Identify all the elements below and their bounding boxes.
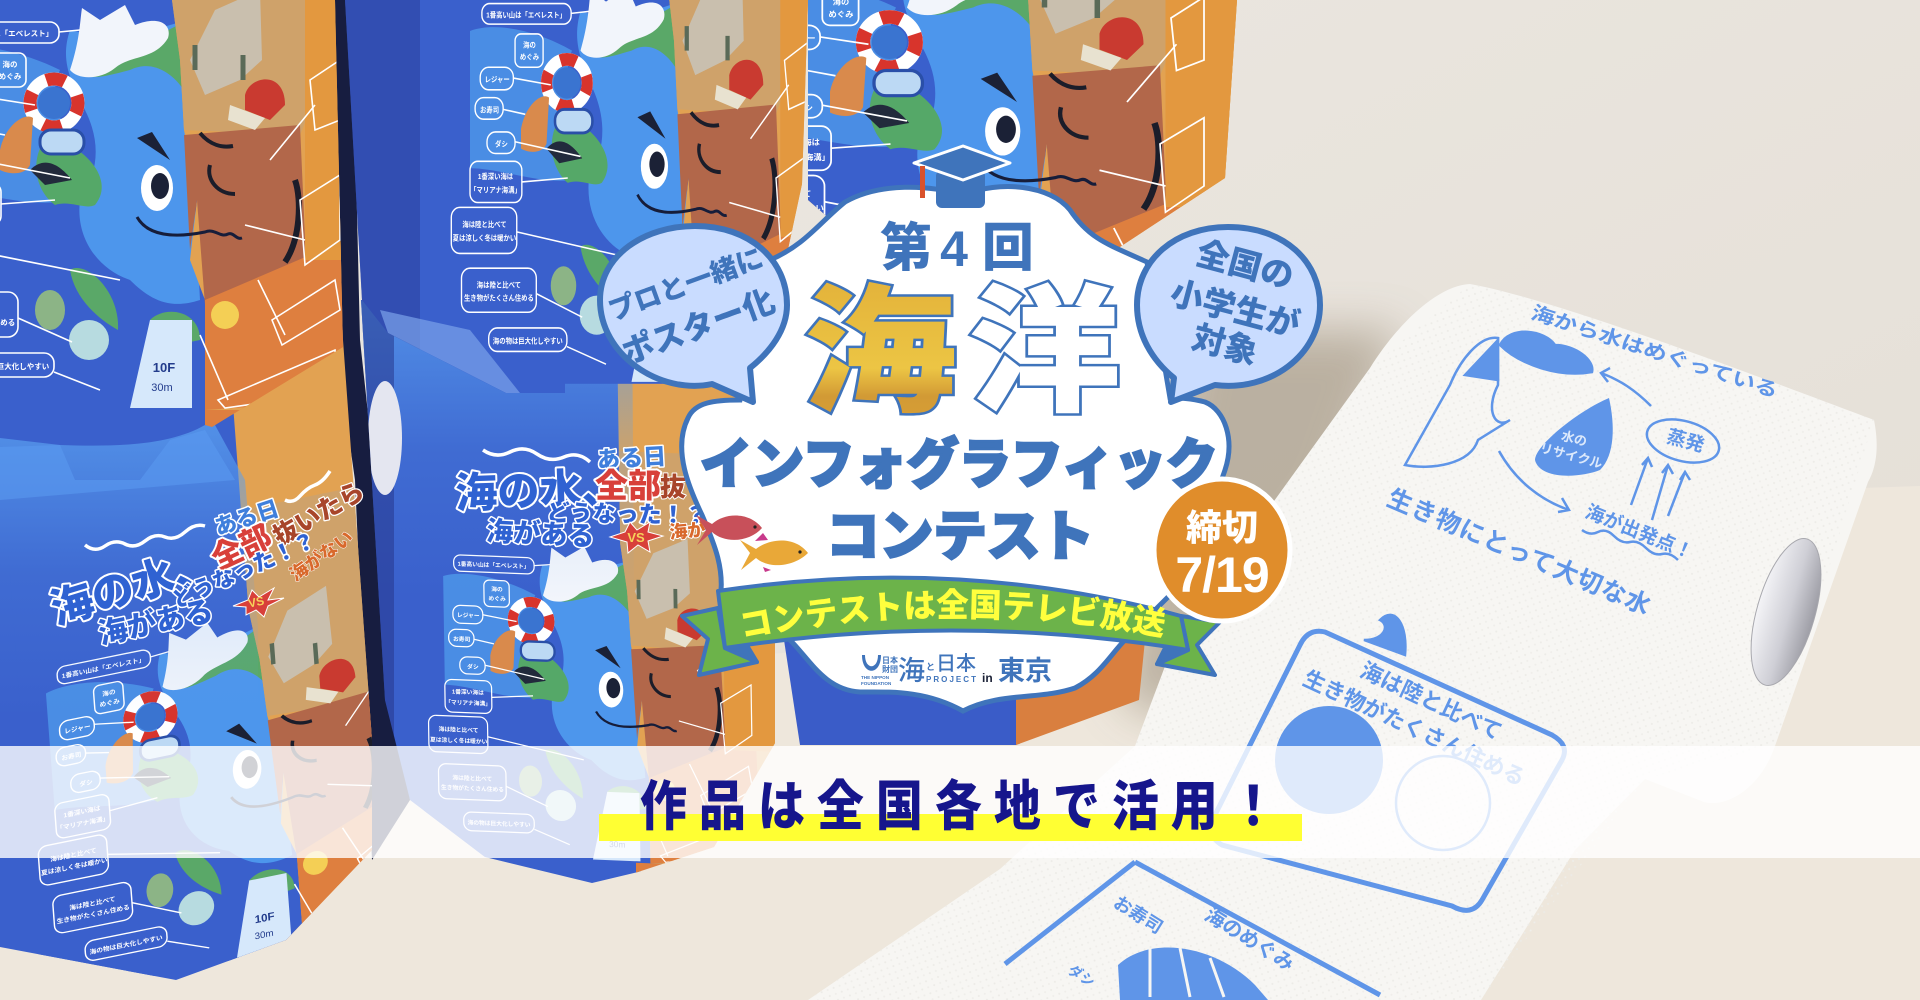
- roll printed captions: リサイクル: [1538, 440, 1604, 471]
- package title: bottom right: 抜: [660, 472, 686, 502]
- logo: The Nippon Foundation, Sea and Japan Project in Tokyo: [861, 652, 1052, 686]
- translucent white band: [0, 746, 1920, 858]
- speech bubble: with professionals: プロと一緒に: [605, 243, 767, 326]
- logo: The Nippon Foundation, Sea and Japan Project in Tokyo: と: [926, 662, 935, 672]
- package title: bottom right: 海の水、: [455, 464, 624, 517]
- package: bottom left: [0, 340, 372, 980]
- package title: bottom left: 海の水、: [46, 539, 220, 633]
- speech bubble: elementary students: 小学生が: [1166, 274, 1304, 344]
- contest badge: [597, 144, 1323, 714]
- roll printed captions: 生き物にとって大切な水: [1383, 484, 1655, 621]
- heading: ocean: [804, 276, 1121, 430]
- roll printed captions: ダシ: [1065, 961, 1098, 990]
- speech bubble: with professionals: ポスター化: [617, 282, 780, 371]
- roll printed captions: 水の: [1560, 428, 1589, 449]
- band highlight: yellow bar: [599, 814, 1302, 841]
- band caption: 作品は全国各地で活用！: [640, 776, 1289, 837]
- package title: bottom right: VS: [627, 530, 645, 545]
- logo: The Nippon Foundation, Sea and Japan Project in Tokyo: FOUNDATION: [861, 681, 892, 686]
- package title: bottom left: 抜いたら: [269, 477, 369, 551]
- logo: The Nippon Foundation, Sea and Japan Project in Tokyo: 海: [898, 656, 925, 686]
- roll printed captions: 海が出発点！: [1582, 500, 1697, 564]
- water drop: [1535, 398, 1613, 476]
- package title: bottom right: 全部: [595, 467, 661, 504]
- package: top centre: [345, 0, 808, 393]
- package title: bottom left: どうなった！？: [169, 527, 319, 613]
- shrimp: [1118, 948, 1268, 1000]
- roll printed captions: 蒸発: [1664, 426, 1707, 457]
- package title: bottom right: [455, 443, 708, 553]
- package title: bottom left: 海がある: [96, 594, 216, 651]
- wave under start text: [1582, 530, 1678, 560]
- logo: The Nippon Foundation, Sea and Japan Project in Tokyo: 日本: [936, 652, 976, 675]
- package title: bottom left: 全部: [206, 519, 277, 576]
- heading: 4th: 第4回: [880, 220, 1040, 278]
- printed heading: 海から水はめぐっている: [1528, 302, 1781, 402]
- sea circle: [1275, 706, 1383, 814]
- background: wall shadow beside roll: [1120, 330, 1400, 720]
- logo: The Nippon Foundation, Sea and Japan Project in Tokyo: 東京: [998, 656, 1052, 686]
- package top folds: [0, 430, 235, 500]
- roll paper body: [808, 284, 1877, 1000]
- package title: bottom right: 海が: [669, 518, 706, 543]
- heading: ocean: 洋: [968, 276, 1121, 430]
- print: water cycle: [1005, 302, 1781, 1000]
- ribbon: TV broadcast: [680, 576, 1222, 677]
- package: top right: [808, 0, 1237, 247]
- panel outline: sea blessings: [1005, 862, 1380, 995]
- heading: contest: コンテスト: [826, 507, 1094, 567]
- steam cloud: [1642, 412, 1724, 470]
- logo: The Nippon Foundation, Sea and Japan Project in Tokyo: PROJECT: [926, 675, 976, 684]
- speech bubble: with professionals: [600, 226, 787, 402]
- package title: bottom left: ある日: [211, 496, 282, 540]
- package title: bottom left: [46, 471, 369, 651]
- deadline badge: 締切: [1186, 507, 1258, 548]
- speech bubble: elementary students: 対象: [1188, 318, 1262, 371]
- package: top left: [0, 0, 343, 446]
- roll printed captions: 海のめぐみ: [1201, 903, 1298, 976]
- land circle: [1396, 756, 1490, 850]
- package title: bottom left: 海がない: [286, 526, 357, 585]
- roll end hole: [1737, 531, 1835, 693]
- roll emboss texture: [808, 284, 1874, 1000]
- roll printed captions: [1065, 426, 1707, 990]
- package stack: [0, 0, 1446, 999]
- speech bubble: elementary students: [1137, 227, 1320, 402]
- icon: red fish: [696, 515, 762, 545]
- cloud: [1500, 332, 1592, 373]
- toilet paper roll: [808, 284, 1877, 1000]
- icon: orange fish: [740, 533, 808, 572]
- roll printed captions: お寿司: [1110, 891, 1167, 938]
- arrows: [1499, 368, 1690, 520]
- logo: The Nippon Foundation, Sea and Japan Project in Tokyo: 日本: [882, 655, 898, 665]
- package title: bottom left: VS: [247, 594, 265, 611]
- package title: bottom right: 海がある: [486, 515, 595, 552]
- land outline: [1405, 338, 1510, 467]
- logo: The Nippon Foundation, Sea and Japan Project in Tokyo: in: [982, 671, 993, 685]
- ribbon: TV broadcast: コンテストは全国テレビ放送: [742, 588, 1165, 638]
- package gap shadow: [335, 0, 410, 860]
- heading: infographic: インフォグラフィック: [700, 434, 1218, 495]
- roll printed captions: 海は陸と比べて: [1356, 658, 1506, 745]
- speech bubble: elementary students: 全国の: [1192, 234, 1298, 296]
- logo: The Nippon Foundation, Sea and Japan Project in Tokyo: 財団: [882, 664, 898, 674]
- icon: graduation cap: [914, 146, 1010, 208]
- deadline badge: 7/19: [1175, 547, 1269, 603]
- deadline badge: [1154, 479, 1290, 621]
- wave icon: [1364, 615, 1405, 655]
- package title: bottom right: どうなった！？: [546, 500, 708, 528]
- roll printed captions: 生き物がたくさん住める: [1299, 666, 1529, 791]
- package: bottom right: [361, 300, 775, 883]
- package: bottom centre behind badge: [784, 640, 1146, 745]
- heading: ocean: 海: [804, 276, 957, 430]
- package title: bottom right: ある日: [596, 443, 667, 473]
- badge white blob: [682, 187, 1229, 711]
- background: floor: [0, 486, 1920, 1000]
- panel outline: sea and land: [1211, 631, 1564, 910]
- logo: The Nippon Foundation, Sea and Japan Project in Tokyo: THE NIPPON: [861, 675, 890, 680]
